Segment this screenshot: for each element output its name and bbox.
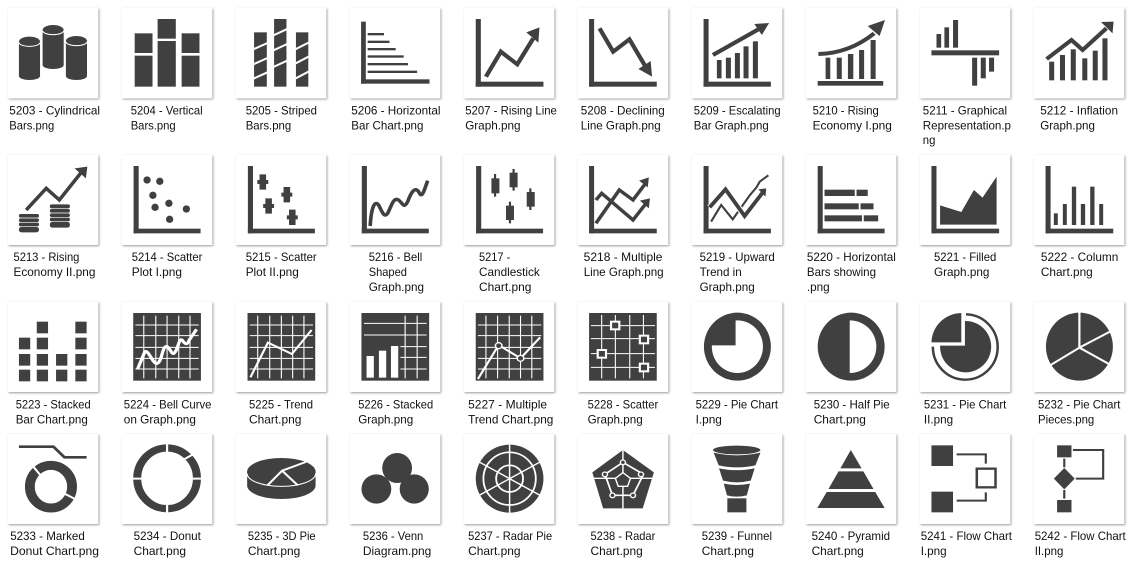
icon: rising line bbox=[476, 19, 543, 87]
label bbox=[16, 397, 91, 426]
card bbox=[122, 8, 212, 98]
tile: 5234 Donut Chart bbox=[122, 434, 212, 558]
label bbox=[363, 529, 431, 558]
card bbox=[350, 434, 440, 524]
label bbox=[1038, 397, 1121, 426]
card bbox=[350, 155, 440, 245]
icon: flow chart with diamond bbox=[1054, 445, 1103, 512]
label bbox=[479, 250, 541, 294]
label: 5236 - Venn bbox=[363, 529, 423, 543]
label bbox=[581, 103, 665, 132]
card bbox=[1034, 8, 1124, 98]
label: II.png bbox=[1035, 544, 1063, 558]
card bbox=[236, 434, 326, 524]
label: Bar Graph.png bbox=[694, 118, 769, 132]
card bbox=[920, 302, 1010, 392]
label bbox=[924, 397, 1007, 426]
label bbox=[249, 397, 313, 426]
label: Plot II.png bbox=[246, 265, 299, 279]
label: 5228 - Scatter bbox=[588, 397, 658, 411]
card bbox=[8, 8, 98, 98]
label: 5209 - Escalating bbox=[694, 103, 781, 117]
card bbox=[1034, 434, 1124, 524]
label: Shaped bbox=[369, 265, 407, 279]
label bbox=[807, 250, 896, 294]
tile: 5218 Multiple Line Graph bbox=[578, 155, 668, 279]
icon: cylinders bbox=[19, 25, 87, 80]
label: Chart.png bbox=[249, 412, 301, 426]
label bbox=[9, 103, 100, 132]
tile: 5241 Flow Chart I bbox=[920, 434, 1013, 558]
label: Economy II.png bbox=[14, 265, 95, 279]
tile: 5208 Declining Line Graph bbox=[578, 8, 668, 132]
label: Diagram.png bbox=[363, 544, 431, 558]
tile: 5212 Inflation Graph bbox=[1034, 8, 1124, 132]
label bbox=[814, 397, 890, 426]
label: Graph.png bbox=[934, 265, 989, 279]
card bbox=[464, 302, 554, 392]
icon: striped bars bbox=[253, 19, 309, 87]
card bbox=[578, 8, 668, 98]
label: I.png bbox=[696, 412, 722, 426]
label: Graph.png bbox=[465, 118, 520, 132]
label: Bars.png bbox=[131, 118, 176, 132]
label bbox=[813, 103, 892, 132]
label bbox=[696, 397, 779, 426]
label bbox=[468, 397, 553, 426]
label: 5217 - bbox=[479, 250, 510, 264]
tile: 5232 Pie Chart Pieces bbox=[1034, 302, 1124, 426]
label: Chart.png bbox=[479, 280, 531, 294]
icon: pie pieces bbox=[1046, 311, 1114, 381]
tile: 5226 Stacked Graph bbox=[350, 302, 440, 426]
label bbox=[369, 250, 424, 294]
icon: scatter crosses bbox=[248, 166, 315, 233]
label: Chart.png bbox=[590, 544, 643, 558]
icon: marked donut bbox=[19, 447, 87, 508]
label: 5240 - Pyramid bbox=[812, 529, 890, 543]
card bbox=[122, 302, 212, 392]
label bbox=[10, 529, 99, 558]
icon: wavy line graph bbox=[362, 166, 429, 233]
label: Chart.png bbox=[814, 412, 866, 426]
icon: inflation bars and line bbox=[1047, 22, 1114, 80]
label bbox=[465, 103, 557, 132]
tile: 5207 Rising Line Graph bbox=[464, 8, 557, 132]
icon: pyramid bbox=[817, 450, 885, 508]
label: 5223 - Stacked bbox=[16, 397, 91, 411]
label: 5212 - Inflation bbox=[1040, 103, 1118, 117]
card bbox=[464, 8, 554, 98]
label: 5224 - Bell Curve bbox=[124, 397, 212, 411]
label: Graph.png bbox=[1040, 118, 1095, 132]
tile: 5219 Upward Trend in Graph bbox=[692, 155, 782, 294]
icon: coins and rising line bbox=[19, 167, 87, 232]
card bbox=[578, 434, 668, 524]
tile: 5210 Rising Economy I bbox=[806, 8, 896, 132]
card bbox=[236, 8, 326, 98]
label: 5211 - Graphical bbox=[923, 103, 1007, 117]
icon: horizontal bar chart bbox=[361, 22, 430, 84]
label bbox=[934, 250, 996, 279]
icon: escalating bars bbox=[704, 19, 771, 87]
label: Bars.png bbox=[246, 118, 291, 132]
label: Graph.png bbox=[588, 412, 643, 426]
label: 5206 - Horizontal bbox=[351, 103, 440, 117]
card bbox=[122, 434, 212, 524]
tile: 5233 Marked Donut Chart bbox=[8, 434, 99, 558]
label: 5215 - Scatter bbox=[246, 250, 317, 264]
label: Bar Chart.png bbox=[351, 118, 423, 132]
label: Plot I.png bbox=[132, 265, 182, 279]
icon: trend with markers on grid bbox=[476, 313, 543, 381]
label: 5203 - Cylindrical bbox=[9, 103, 100, 117]
label: 5219 - Upward bbox=[700, 250, 775, 264]
label: 5204 - Vertical bbox=[131, 103, 203, 117]
tile: 5229 Pie Chart I bbox=[692, 302, 782, 426]
icon: scatter on grid bbox=[589, 313, 657, 381]
label: 5242 - Flow Chart bbox=[1035, 529, 1126, 543]
label: Chart.png bbox=[1041, 265, 1093, 279]
tile: 5225 Trend Chart bbox=[236, 302, 326, 426]
label bbox=[248, 529, 316, 558]
label: ng bbox=[923, 133, 935, 147]
card bbox=[578, 155, 668, 245]
label: 5231 - Pie Chart bbox=[924, 397, 1007, 411]
tile: 5228 Scatter Graph bbox=[578, 302, 668, 426]
card bbox=[920, 434, 1010, 524]
label: 5239 - Funnel bbox=[702, 529, 772, 543]
label bbox=[351, 103, 440, 132]
tile: 5227 Multiple Trend Chart bbox=[464, 302, 554, 426]
icon: bell curve on grid bbox=[133, 313, 201, 381]
label bbox=[131, 103, 203, 132]
label bbox=[921, 529, 1013, 558]
tile: 5239 Funnel Chart bbox=[692, 434, 782, 558]
label: Graph.png bbox=[700, 280, 755, 294]
icon: vertical bars bbox=[135, 19, 199, 87]
label: Chart.png bbox=[812, 544, 864, 558]
label: 5214 - Scatter bbox=[132, 250, 202, 264]
icon: half pie bbox=[818, 313, 885, 381]
card bbox=[350, 8, 440, 98]
label bbox=[1035, 529, 1126, 558]
label: Candlestick bbox=[479, 265, 541, 279]
tile: 5224 Bell Curve on Graph bbox=[122, 302, 212, 426]
label bbox=[812, 529, 890, 558]
label bbox=[590, 529, 655, 558]
tile: 5216 Bell Shaped Graph bbox=[350, 155, 440, 294]
label: Line Graph.png bbox=[584, 265, 664, 279]
tile: 5236 Venn Diagram bbox=[350, 434, 440, 558]
tile: 5235 3D Pie Chart bbox=[236, 434, 326, 558]
card bbox=[464, 434, 554, 524]
label: II.png bbox=[924, 412, 953, 426]
card bbox=[806, 155, 896, 245]
label: 5207 - Rising Line bbox=[465, 103, 557, 117]
card bbox=[806, 434, 896, 524]
card bbox=[920, 8, 1010, 98]
label: 5237 - Radar Pie bbox=[468, 529, 552, 543]
card bbox=[692, 302, 782, 392]
label: Economy I.png bbox=[813, 118, 892, 132]
tile: 5205 Striped Bars bbox=[236, 8, 326, 132]
card bbox=[692, 434, 782, 524]
label: Graph.png bbox=[369, 280, 424, 294]
card bbox=[236, 155, 326, 245]
card bbox=[236, 302, 326, 392]
label bbox=[358, 397, 433, 426]
label: Chart.png bbox=[468, 544, 520, 558]
tile: 5203 Cylindrical Bars bbox=[8, 8, 100, 132]
tile: 5204 Vertical Bars bbox=[122, 8, 212, 132]
icon: trend on grid bbox=[248, 313, 315, 381]
label bbox=[246, 103, 317, 132]
label bbox=[134, 529, 202, 558]
icon: bars on grid bbox=[361, 313, 429, 381]
label: Graph.png bbox=[358, 412, 413, 426]
icon: flow chart with squares bbox=[931, 445, 996, 512]
icon: filled area graph bbox=[931, 166, 999, 233]
card bbox=[578, 302, 668, 392]
label: I.png bbox=[921, 544, 947, 558]
tile: 5220 Horizontal Bars bbox=[806, 155, 896, 294]
icon: upward trend lines bbox=[704, 166, 771, 233]
card bbox=[8, 155, 98, 245]
label: Trend Chart.png bbox=[468, 412, 553, 426]
icon: radar pentagon bbox=[592, 450, 654, 508]
label: Chart.png bbox=[702, 544, 754, 558]
tile: 5214 Scatter Plot I bbox=[122, 155, 212, 279]
tile: 5222 Column Chart bbox=[1034, 155, 1124, 279]
label bbox=[124, 397, 212, 426]
label: 5210 - Rising bbox=[813, 103, 879, 117]
card bbox=[350, 302, 440, 392]
label: Line Graph.png bbox=[581, 118, 661, 132]
icon: diverging bars bbox=[931, 20, 999, 86]
label bbox=[1041, 250, 1118, 279]
label: on Graph.png bbox=[124, 412, 196, 426]
tile: 5240 Pyramid Chart bbox=[806, 434, 896, 558]
card bbox=[692, 155, 782, 245]
card bbox=[806, 8, 896, 98]
label: 5232 - Pie Chart bbox=[1038, 397, 1121, 411]
icon: segmented horizontal bars bbox=[818, 166, 885, 233]
icon: quarter pie ring bbox=[704, 313, 771, 381]
label bbox=[1040, 103, 1118, 132]
label bbox=[14, 250, 95, 279]
label: .png bbox=[807, 280, 830, 294]
tile: 5215 Scatter Plot II bbox=[236, 155, 326, 279]
label: 5230 - Half Pie bbox=[814, 397, 890, 411]
tile: 5230 Half Pie Chart bbox=[806, 302, 896, 426]
label bbox=[132, 250, 202, 279]
card bbox=[464, 155, 554, 245]
label: 5229 - Pie Chart bbox=[696, 397, 779, 411]
label: Pieces.png bbox=[1038, 412, 1094, 426]
tile: 5221 Filled Graph bbox=[920, 155, 1010, 279]
label: 5225 - Trend bbox=[249, 397, 313, 411]
icon: segmented donut bbox=[130, 443, 204, 514]
tile: 5223 Stacked Bar Chart bbox=[8, 302, 98, 426]
icon: funnel bbox=[713, 446, 760, 512]
label bbox=[246, 250, 317, 279]
card bbox=[8, 302, 98, 392]
label: Representation.p bbox=[923, 118, 1011, 132]
label bbox=[702, 529, 772, 558]
icon: rising economy curve bbox=[818, 20, 885, 86]
label bbox=[700, 250, 775, 294]
card bbox=[692, 8, 782, 98]
label: 5227 - Multiple bbox=[468, 397, 547, 411]
card bbox=[806, 302, 896, 392]
label: 5233 - Marked bbox=[10, 529, 85, 543]
tile: 5237 Radar Pie Chart bbox=[464, 434, 554, 558]
icon: pie with ring and wedge bbox=[931, 313, 998, 380]
icon: 3D pie bbox=[247, 458, 316, 499]
icon: declining line bbox=[589, 19, 657, 87]
tile: 5211 Graphical Representation bbox=[920, 8, 1011, 147]
label: 5213 - Rising bbox=[14, 250, 79, 264]
label: 5226 - Stacked bbox=[358, 397, 433, 411]
label: 5234 - Donut bbox=[134, 529, 202, 543]
tile: 5217 Candlestick Chart bbox=[464, 155, 554, 294]
label: Chart.png bbox=[248, 544, 300, 558]
icon: column chart bbox=[1046, 166, 1113, 233]
card bbox=[122, 155, 212, 245]
label: 5220 - Horizontal bbox=[807, 250, 896, 264]
card bbox=[1034, 302, 1124, 392]
label: 5218 - Multiple bbox=[584, 250, 663, 264]
icon: candlesticks bbox=[476, 166, 543, 233]
label bbox=[584, 250, 664, 279]
label bbox=[923, 103, 1011, 147]
icon: two rising lines bbox=[589, 166, 657, 233]
label: 5221 - Filled bbox=[934, 250, 996, 264]
label: 5241 - Flow Chart bbox=[921, 529, 1013, 543]
tile: 5209 Escalating Bar Graph bbox=[692, 8, 782, 132]
label: 5208 - Declining bbox=[581, 103, 665, 117]
tile: 5231 Pie Chart II bbox=[920, 302, 1010, 426]
tile: 5206 Horizontal Bar Chart bbox=[350, 8, 440, 132]
label: 5238 - Radar bbox=[590, 529, 655, 543]
label: Bar Chart.png bbox=[16, 412, 88, 426]
label: Bars showing bbox=[807, 265, 876, 279]
label: 5205 - Striped bbox=[246, 103, 317, 117]
card bbox=[8, 434, 98, 524]
label: Trend in bbox=[700, 265, 742, 279]
icon: stacked squares bbox=[19, 322, 87, 381]
card bbox=[1034, 155, 1124, 245]
label bbox=[588, 397, 658, 426]
icon: scatter dots bbox=[134, 166, 201, 233]
label: Chart.png bbox=[134, 544, 186, 558]
label: 5222 - Column bbox=[1041, 250, 1118, 264]
card bbox=[920, 155, 1010, 245]
label: 5235 - 3D Pie bbox=[248, 529, 316, 543]
label: Bars.png bbox=[9, 118, 54, 132]
label bbox=[694, 103, 781, 132]
label: 5216 - Bell bbox=[369, 250, 422, 264]
icon: radar pie bbox=[476, 444, 543, 513]
icon: three circles bbox=[361, 453, 429, 504]
tile: 5213 Rising Economy II bbox=[8, 155, 98, 279]
label: Donut Chart.png bbox=[10, 544, 99, 558]
tile: 5242 Flow Chart II bbox=[1034, 434, 1126, 558]
tile: 5238 Radar Chart bbox=[578, 434, 668, 558]
label bbox=[468, 529, 552, 558]
